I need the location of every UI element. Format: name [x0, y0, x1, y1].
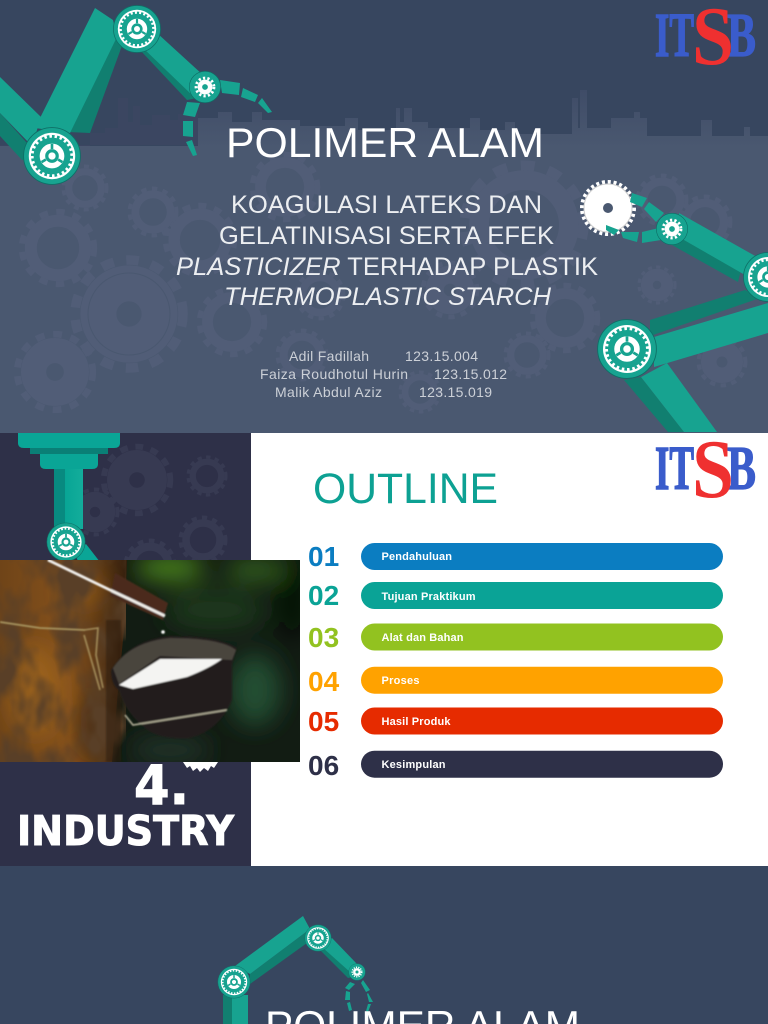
item 03: Alat dan Bahan [382, 632, 464, 644]
panel: title slide [0, 0, 768, 433]
item 04: 04 [308, 666, 340, 697]
panel: outline slide [0, 423, 768, 866]
robot arm: top left [0, 5, 272, 184]
item 05: 05 [308, 706, 339, 737]
authors: Faiza Roudhotul Hurin [260, 366, 408, 382]
item 06 [308, 750, 723, 781]
skyline silhouette [0, 90, 768, 433]
title: POLIMER ALAM [226, 119, 544, 166]
item 01 [308, 541, 723, 572]
authors: 123.15.019 [419, 384, 492, 400]
item 05: Hasil Produk [382, 716, 451, 728]
white gear fragment [183, 762, 218, 772]
small robot arm [218, 916, 373, 1024]
panel: third slide [218, 916, 577, 1024]
logo: ITSB: S [692, 423, 734, 516]
item 02: 02 [308, 580, 339, 611]
item 02: Tujuan Praktikum [382, 591, 476, 603]
item 03 [308, 622, 723, 653]
logo: ITSB: IT [655, 435, 694, 503]
subtitle: GELATINISASI SERTA EFEK [219, 222, 554, 250]
subtitle: THERMOPLASTIC STARCH [224, 283, 552, 311]
subtitle [176, 191, 598, 311]
logo: ITSB: IT [655, 2, 694, 70]
authors: 123.15.012 [434, 366, 507, 382]
authors: 123.15.004 [405, 348, 478, 364]
item 01: 01 [308, 541, 339, 572]
item 03: 03 [308, 622, 339, 653]
item 01: Pendahuluan [382, 551, 452, 563]
robot column [18, 433, 120, 562]
subtitle: KOAGULASI LATEKS DAN [231, 191, 542, 219]
item 06: Kesimpulan [382, 759, 446, 771]
authors: Malik Abdul Aziz [275, 384, 382, 400]
joint gears [24, 128, 80, 184]
logo: ITSB: B [727, 435, 756, 503]
item 02 [308, 580, 723, 611]
photo: latex tapping [0, 556, 304, 762]
subtitle: PLASTICIZER TERHADAP PLASTIK [176, 253, 598, 281]
heading: 4.: 4. [134, 754, 189, 817]
item 06: 06 [308, 750, 339, 781]
authors: Adil Fadillah [289, 348, 369, 364]
logo: ITSB [655, 0, 756, 83]
authors [260, 348, 507, 400]
left dark panel [0, 433, 251, 866]
robot arm: right [582, 182, 768, 432]
logo: ITSB: B [727, 2, 756, 70]
gripped white gear [582, 182, 634, 234]
dark panel gears [72, 447, 226, 589]
item 04 [308, 666, 723, 697]
heading: INDUSTRY: INDUSTRY [17, 807, 235, 855]
background gears [17, 155, 745, 412]
heading: outline: OUTLINE [313, 465, 498, 513]
joint gear [47, 523, 85, 561]
logo: ITSB [655, 423, 756, 516]
item 05 [308, 706, 723, 737]
item 04: Proses [382, 675, 420, 687]
